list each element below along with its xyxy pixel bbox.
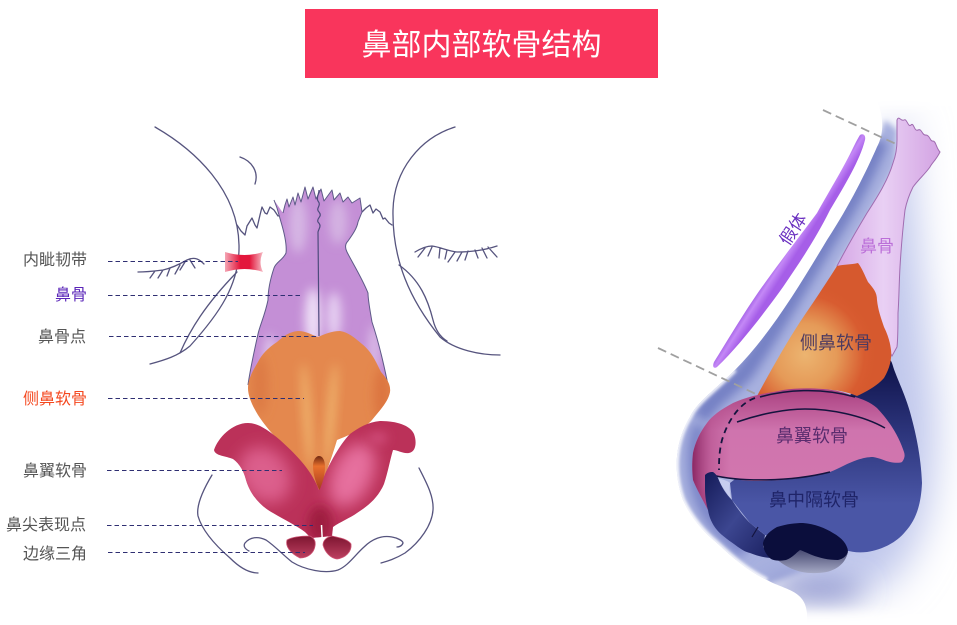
label: tip defining point: 鼻尖表现点 (6, 516, 86, 534)
implant label: 假体 (776, 210, 811, 249)
implant (713, 134, 865, 368)
label: nasion point: 鼻骨点 (38, 328, 86, 346)
face contour lines (150, 127, 500, 364)
panel: front view of the nose (138, 127, 500, 573)
lateral cartilage front (248, 331, 390, 490)
callout labels (6, 251, 318, 563)
columella (705, 472, 772, 558)
nasal bone side label: 鼻骨 (860, 237, 894, 256)
eyelashes right (415, 246, 497, 262)
nostril contour lines (198, 475, 258, 573)
septal cartilage label: 鼻中隔软骨 (769, 490, 859, 510)
reference dashed lines (658, 110, 896, 395)
panel: side view of the nose (658, 109, 957, 615)
nostril (763, 523, 848, 561)
nostril shadow (772, 540, 848, 573)
label: lateral cartilage: 侧鼻软骨 (23, 390, 87, 408)
side nasal bone (837, 118, 940, 356)
title banner (305, 9, 658, 78)
alar cartilage side label: 鼻翼软骨 (776, 426, 848, 446)
medial canthal ligament (225, 252, 263, 272)
label: medial canthal ligament: 内眦韧带 (23, 251, 87, 269)
alar cartilage side (692, 388, 905, 510)
eyelashes left (138, 258, 204, 278)
label: marginal triangle: 边缘三角 (23, 545, 87, 563)
label: nasal bone: 鼻骨 (55, 286, 87, 304)
label: alar cartilage: 鼻翼软骨 (23, 462, 87, 480)
title banner: 鼻部内部软骨结构 (362, 29, 602, 62)
nasal bone (248, 186, 388, 386)
lateral cartilage side label: 侧鼻软骨 (800, 333, 872, 353)
skin shading (676, 114, 957, 615)
alar foot right (323, 536, 351, 559)
gap behind columella (718, 478, 732, 500)
lateral cartilage side (757, 263, 891, 396)
alar cartilages front (214, 421, 416, 560)
septal cartilage (730, 359, 922, 552)
alar foot left (287, 536, 315, 558)
nasal tip point (313, 456, 325, 490)
